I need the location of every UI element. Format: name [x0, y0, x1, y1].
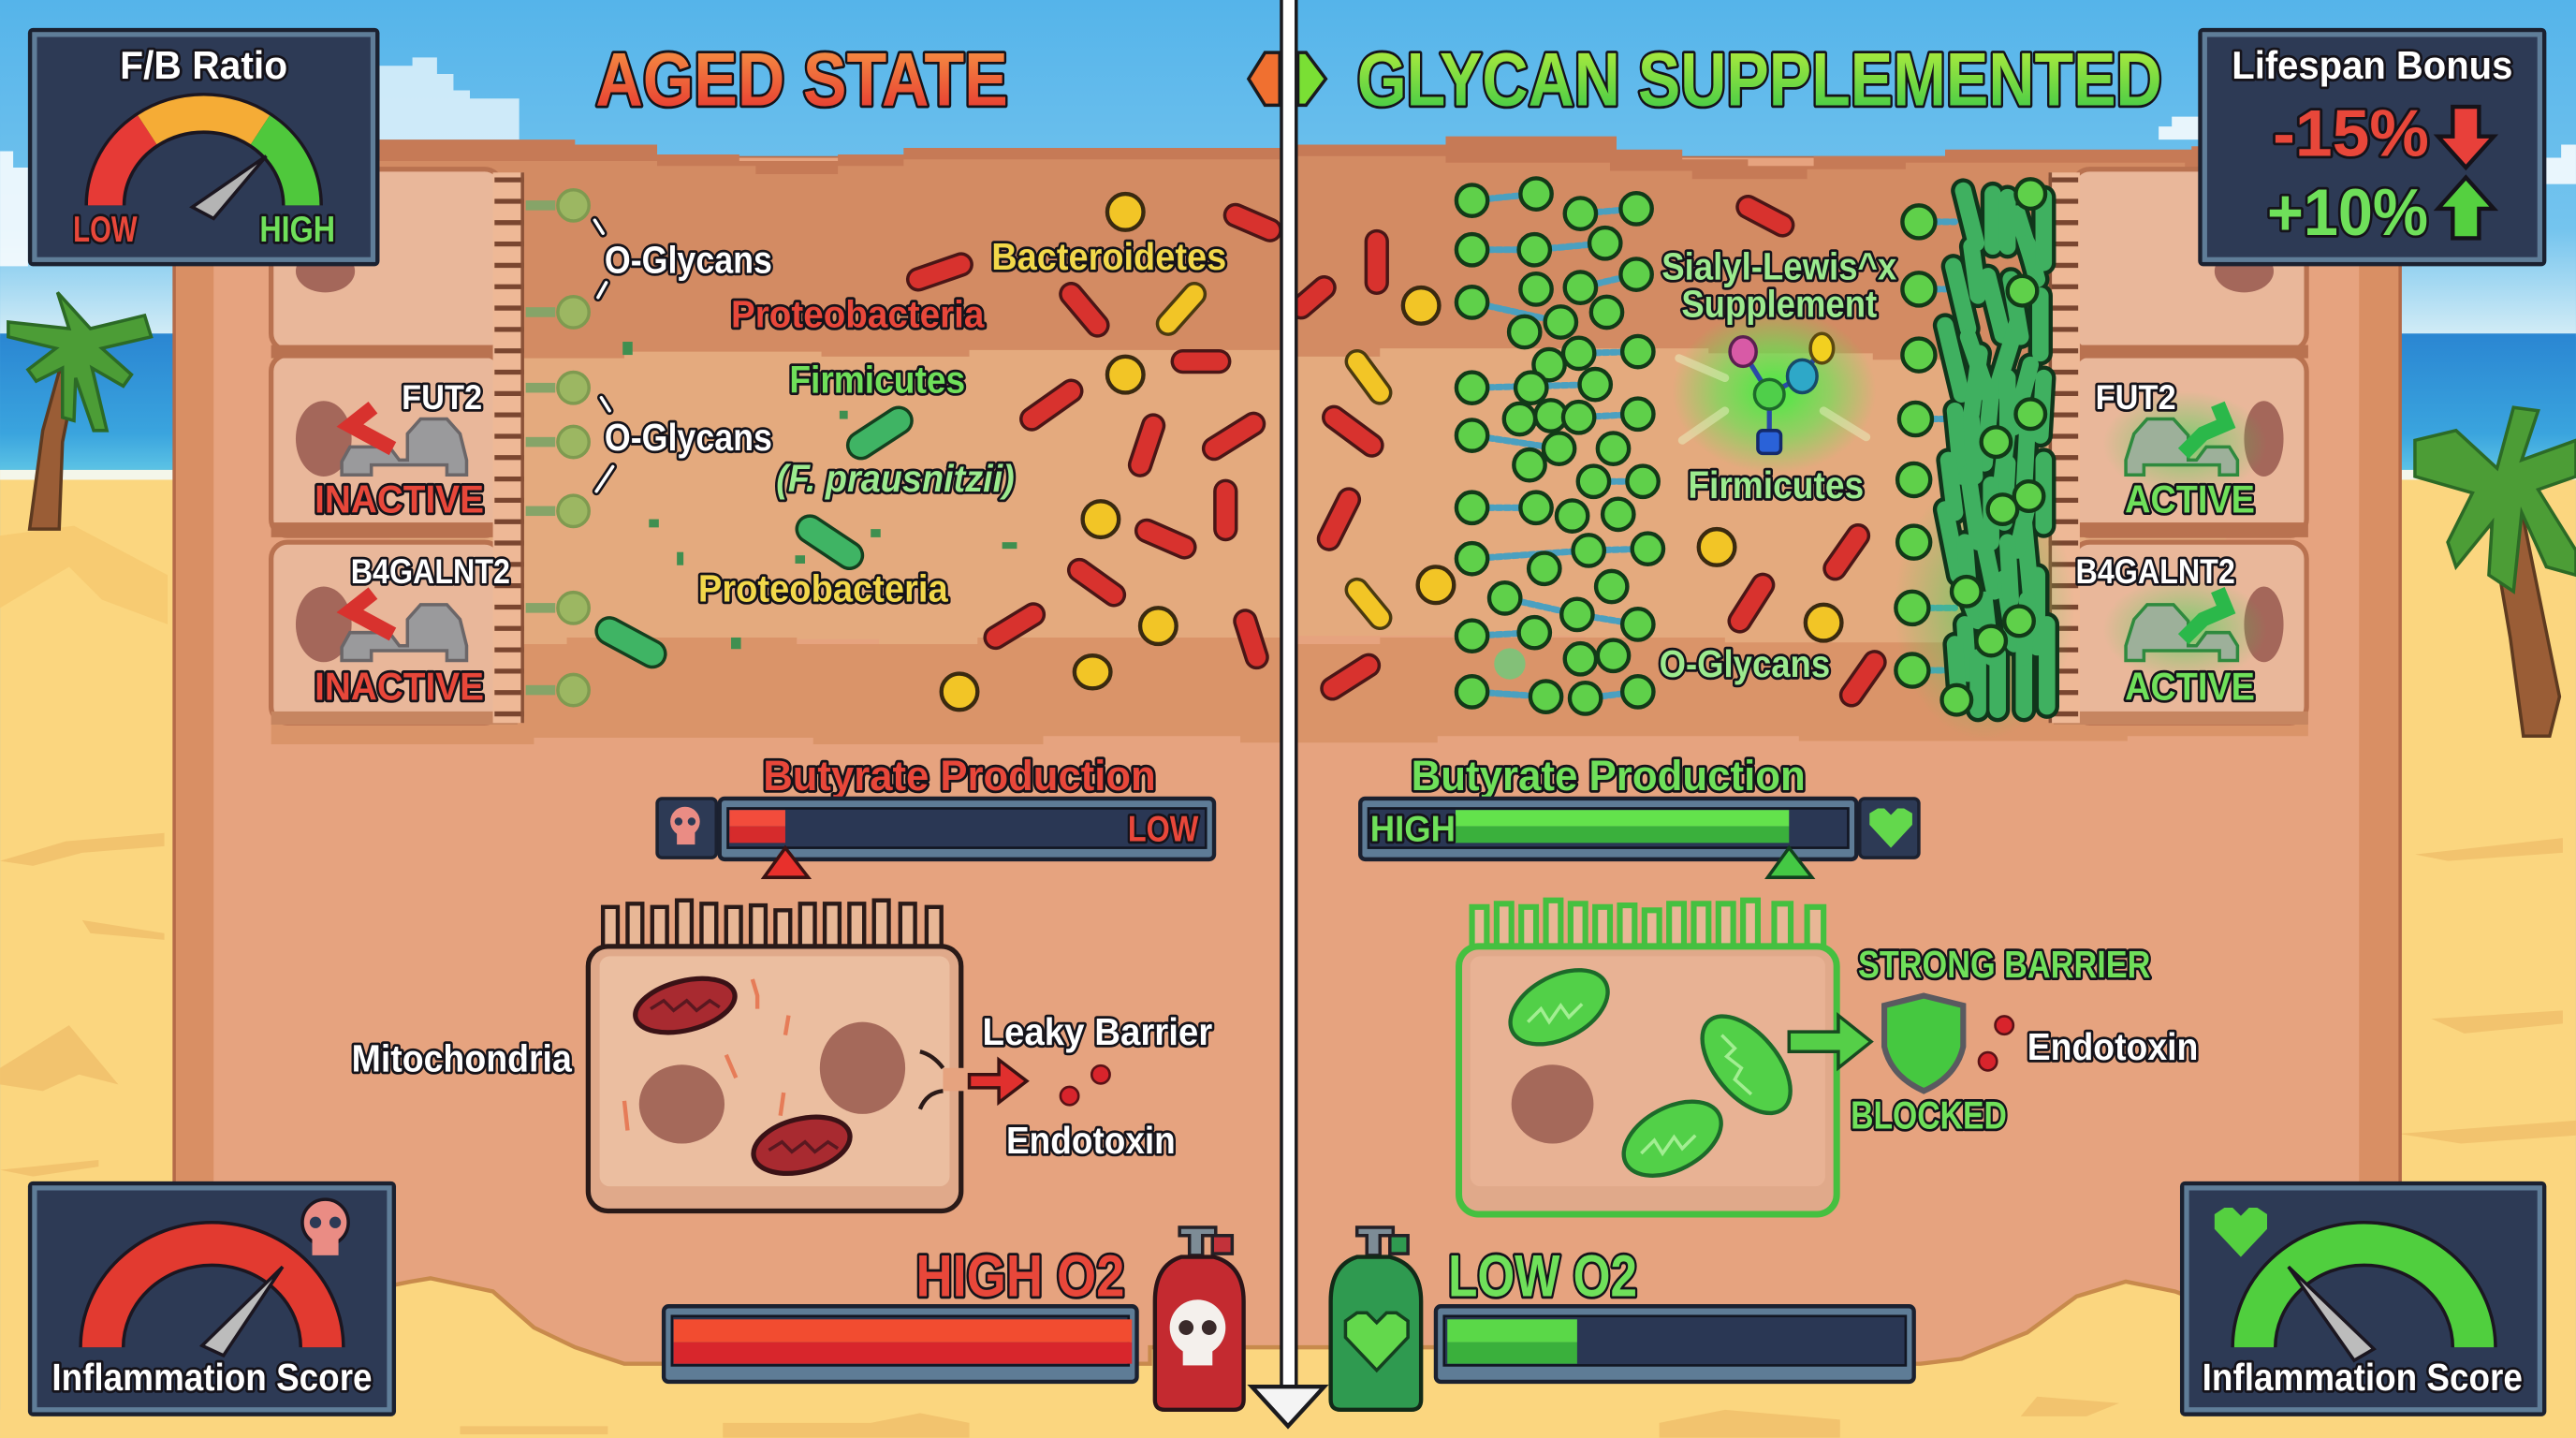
- title: aged state: AGED STATE: [595, 37, 1008, 122]
- butyrate production aged: Butyrate Production: [763, 752, 1156, 800]
- arrow: to shield: [1789, 1016, 1871, 1068]
- icon: shield: [1884, 996, 1963, 1091]
- panel: lifespan bonus: [2198, 28, 2546, 266]
- labels: right mucus: O-Glycans: [1660, 642, 1830, 685]
- icon: sialyl-Lewis x glycan molecule: [1673, 309, 1876, 473]
- low O2 bar: [1436, 1244, 1914, 1382]
- mucus layer outer band: [379, 156, 2185, 360]
- label: mitochondria: Mitochondria: [352, 1036, 572, 1079]
- labels: left mucus: INACTIVE: [315, 477, 484, 521]
- labels: right mucus: B4GALNT2: [2076, 552, 2235, 591]
- right bacteria: yellow coins: [1403, 287, 1841, 640]
- labels: right mucus: Firmicutes: [1688, 463, 1864, 506]
- icon: endotoxin particles aged: [1061, 1065, 1110, 1105]
- labels: left mucus: Proteobacteria: [698, 566, 948, 609]
- panel: F/B ratio gauge: HIGH: [259, 210, 335, 250]
- colony glycan nodes: [1895, 179, 2045, 714]
- right epithelial cells: [2054, 169, 2308, 725]
- icon: red O2 tank: [1155, 1227, 1244, 1410]
- left O-glycan nodes: [526, 190, 589, 706]
- butyrate production supplemented: Butyrate Production: [1412, 752, 1806, 800]
- center divider line: [1280, 0, 1298, 1390]
- high O2 bar: HIGH O2: [915, 1244, 1124, 1310]
- mucus layer top edge: [379, 137, 2291, 196]
- label: leaky barrier: Leaky Barrier: [983, 1010, 1213, 1053]
- panel: F/B ratio gauge: LOW: [73, 210, 138, 250]
- mucus layer lower band: [271, 638, 2308, 744]
- labels: left mucus: (F. prausnitzii): [776, 457, 1015, 500]
- labels: right mucus: FUT2: [2096, 378, 2176, 417]
- label: strong barrier: STRONG BARRIER: [1858, 943, 2150, 986]
- labels: left mucus: Proteobacteria: [731, 292, 985, 335]
- icon: green O2 tank: [1331, 1227, 1421, 1410]
- panel: lifespan bonus: Lifespan Bonus: [2232, 43, 2512, 87]
- labels: right mucus: Supplement: [1681, 283, 1877, 326]
- labels: left mucus: B4GALNT2: [351, 552, 510, 591]
- panel: F/B ratio gauge: [28, 28, 379, 266]
- butyrate production supplemented: HIGH: [1370, 810, 1456, 850]
- low O2 bar: LOW O2: [1448, 1244, 1637, 1310]
- aged epithelial cell: [588, 901, 970, 1211]
- labels: left mucus: Bacteroidetes: [991, 235, 1226, 278]
- enzyme B4GALNT2 active: [2102, 577, 2284, 682]
- enzyme FUT2 inactive: [296, 401, 466, 477]
- labels: right mucus: ACTIVE: [2125, 477, 2255, 521]
- right glycan chains: green nodes: [1456, 178, 1663, 714]
- labels: left mucus: FUT2: [402, 378, 482, 417]
- left bacteria: yellow rod: [1168, 294, 1380, 618]
- palm tree left: [8, 292, 152, 529]
- dune over board: [0, 1278, 2576, 1438]
- panel: inflammation score aged: Inflammation Score: [51, 1356, 373, 1399]
- right glycan chains: connectors: [1472, 194, 1955, 698]
- background: beach sand: [0, 470, 2576, 1438]
- labels: left mucus: O-Glycans: [605, 238, 772, 281]
- enzyme B4GALNT2 inactive: [296, 587, 466, 662]
- high O2 bar: [664, 1244, 1137, 1382]
- label: endotoxin aged: Endotoxin: [1006, 1119, 1176, 1162]
- label: blocked: BLOCKED: [1851, 1093, 2007, 1137]
- panel: lifespan bonus: +10%: [2267, 175, 2428, 249]
- background: sea left: [0, 333, 181, 477]
- panel: F/B ratio gauge: F/B Ratio: [120, 43, 287, 87]
- board interior: [213, 157, 2359, 1438]
- right microvilli comb: [2049, 172, 2080, 723]
- labels: right mucus: [1660, 244, 2255, 709]
- left epithelial cells: [271, 169, 518, 725]
- butyrate production aged: LOW: [1128, 810, 1199, 850]
- palm tree right: [2415, 407, 2576, 736]
- background: sea right: [2395, 333, 2576, 477]
- center diamond: [1249, 52, 1325, 105]
- background: sky: [0, 0, 2576, 337]
- left bacteria: yellow coins: [942, 194, 1177, 710]
- arrow: center down: [1251, 1387, 1325, 1426]
- icon: endotoxin particles blocked: [1979, 1016, 2013, 1070]
- left bacteria: green rods: [609, 420, 899, 654]
- green debris particles: [622, 342, 1017, 649]
- label: endotoxin blocked: Endotoxin: [2027, 1025, 2198, 1068]
- left bacteria: red rods: [918, 215, 1270, 657]
- O-glycan bracket marks: [594, 220, 613, 492]
- labels: left mucus: Firmicutes: [789, 358, 965, 401]
- enzyme FUT2 active: [2102, 391, 2284, 496]
- arrow: leak out: [970, 1060, 1027, 1103]
- panel: lifespan bonus: -15%: [2273, 96, 2429, 170]
- background: clouds: [0, 57, 2576, 266]
- butyrate production supplemented: [1360, 752, 1919, 877]
- panel: inflammation score supplemented: Inflammation Score: [2203, 1356, 2523, 1399]
- labels: right mucus: Sialyl-Lewis^x: [1661, 244, 1897, 287]
- sand patches: [460, 1397, 2119, 1438]
- board frame: [174, 157, 2400, 1438]
- labels: left mucus: O-Glycans: [605, 416, 772, 459]
- panel: inflammation score supplemented: [2180, 1181, 2546, 1416]
- butyrate production aged: [657, 752, 1214, 877]
- green firmicutes colony: [1895, 191, 2075, 740]
- title: glycan supplemented: GLYCAN SUPPLEMENTED: [1357, 37, 2162, 122]
- labels: left mucus: [315, 235, 1226, 709]
- mucus layer middle band: [271, 348, 2226, 647]
- labels: right mucus: ACTIVE: [2125, 665, 2255, 709]
- right bacteria: red rods: [1301, 207, 1875, 695]
- left microvilli comb: [493, 172, 524, 723]
- labels: left mucus: INACTIVE: [315, 665, 484, 709]
- panel: inflammation score aged: [28, 1181, 396, 1416]
- supplemented epithelial cell: [1459, 901, 1837, 1214]
